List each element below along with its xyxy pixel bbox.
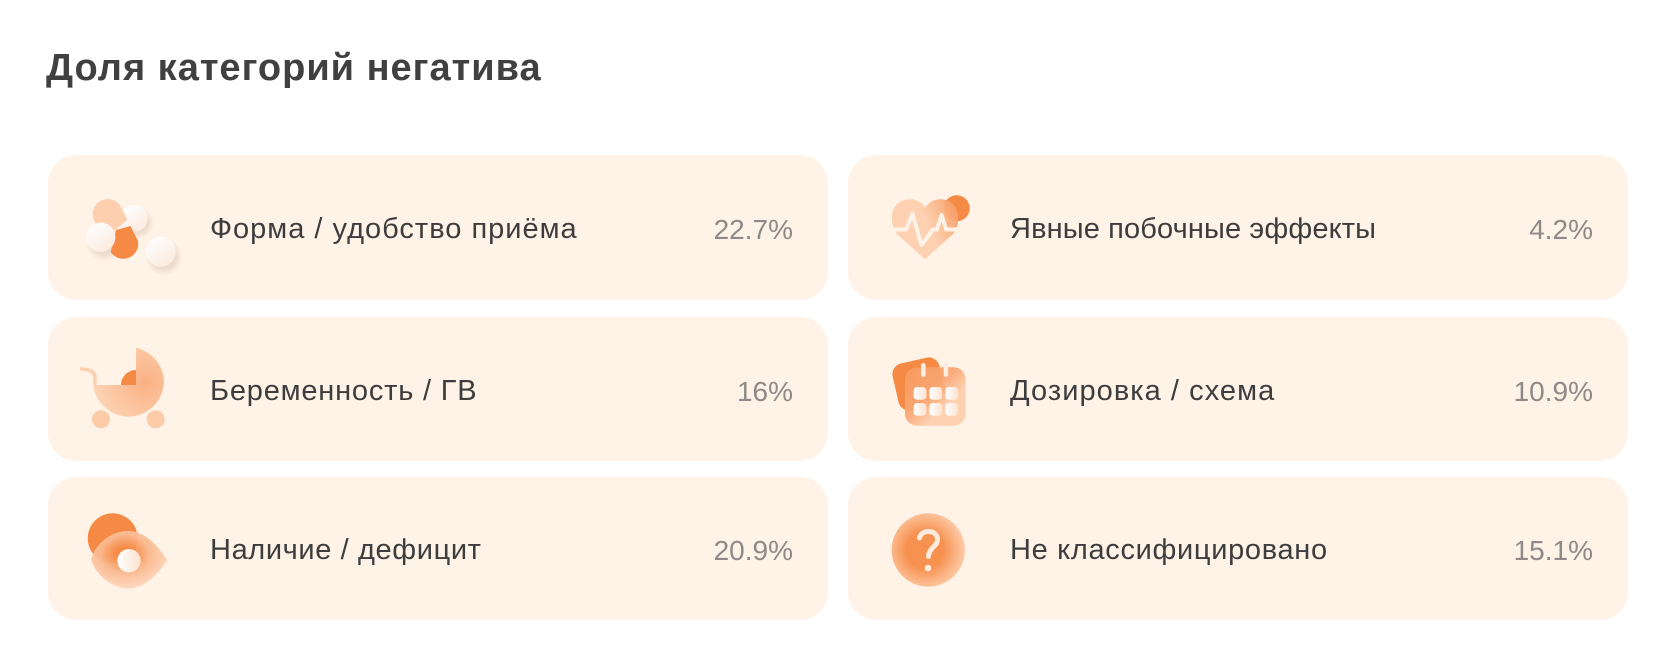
label: Форма / удобство приёма xyxy=(210,213,578,245)
value: 15.1% xyxy=(1514,535,1593,566)
label: Не классифицировано xyxy=(1010,534,1328,566)
label: Явные побочные эффекты xyxy=(1010,213,1376,245)
label: Дозировка / схема xyxy=(1010,375,1275,407)
panel: беременность / гв xyxy=(48,317,828,461)
label: Наличие / дефицит xyxy=(210,534,482,566)
icon: pills xyxy=(86,199,180,274)
value: 22.7% xyxy=(714,214,793,245)
label: Беременность / ГВ xyxy=(210,375,477,407)
title: Доля категорий негатива xyxy=(46,47,542,89)
panel: дозировка / схема xyxy=(848,317,1628,461)
icon: eye xyxy=(88,513,168,588)
icon: stroller xyxy=(80,348,165,428)
value: 10.9% xyxy=(1514,376,1593,407)
panel: наличие / дефицит xyxy=(48,477,828,620)
icon: heart xyxy=(892,195,970,259)
panel: явные побочные эффекты xyxy=(848,155,1628,300)
panel: форма / удобство приёма xyxy=(48,155,828,300)
icon: question mark xyxy=(892,513,965,587)
value: 16% xyxy=(737,376,793,407)
value: 4.2% xyxy=(1529,214,1593,245)
value: 20.9% xyxy=(714,535,793,566)
panel: не классифицировано xyxy=(848,477,1628,620)
icon: calendar xyxy=(892,357,966,426)
